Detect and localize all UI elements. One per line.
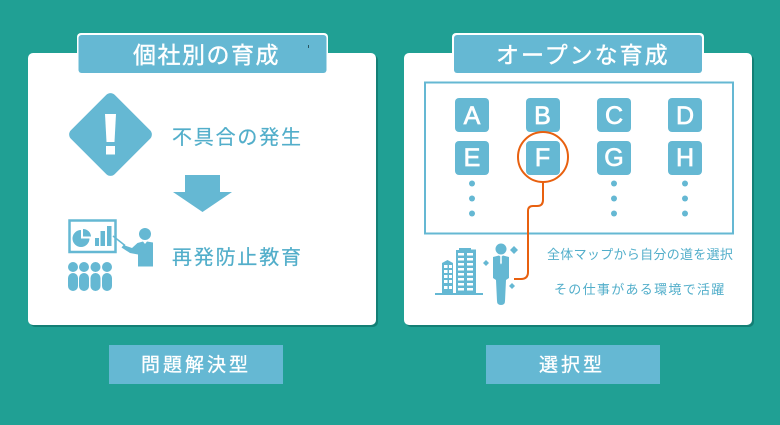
tile: E: E xyxy=(464,144,480,172)
dots: continuation markers xyxy=(469,180,688,216)
label: problem solving type xyxy=(109,345,283,384)
icon: presenter with audience xyxy=(68,220,153,291)
text: prevention training: 再発防止教育 xyxy=(172,246,303,269)
panel: skill map frame xyxy=(425,82,733,234)
tile: C: C xyxy=(605,102,623,130)
label: selection type xyxy=(486,345,660,384)
text: thrive in the right environment: その仕事がある環境で活躍 xyxy=(554,282,726,297)
tile: F xyxy=(526,141,560,175)
label: problem solving type: 問題解決型 xyxy=(141,354,251,376)
tile: G xyxy=(597,141,631,175)
arrow: down xyxy=(173,175,232,212)
tile: B xyxy=(526,98,560,132)
tile: G: G xyxy=(604,144,624,172)
tile: D: D xyxy=(676,102,694,130)
icon: buildings xyxy=(435,248,483,295)
tile: E xyxy=(455,141,489,175)
tile: F: F xyxy=(535,144,550,172)
icon: warning diamond xyxy=(67,91,154,178)
callout: orange selection circle and line xyxy=(514,132,568,279)
label: selection type: 選択型 xyxy=(539,354,605,376)
icon: businessperson with sparkles xyxy=(483,244,518,305)
heading: right tab xyxy=(452,33,704,74)
tile: D xyxy=(668,98,702,132)
heading: left tab xyxy=(77,33,328,74)
tile: A xyxy=(455,98,489,132)
tile: C xyxy=(597,98,631,132)
heading: left tab: 個社別の育成 xyxy=(133,42,280,68)
text: choose own path on the full map: 全体マップから自分の道を選択 xyxy=(547,247,733,262)
tile: A: A xyxy=(464,102,481,130)
tile: H: H xyxy=(676,144,694,172)
heading: right tab: オープンな育成 xyxy=(496,42,670,68)
panel: right card xyxy=(404,53,754,327)
tile: H xyxy=(668,141,702,175)
text: problem occurs: 不具合の発生 xyxy=(172,126,303,149)
panel: left card xyxy=(28,53,378,327)
tile: B: B xyxy=(534,102,551,130)
